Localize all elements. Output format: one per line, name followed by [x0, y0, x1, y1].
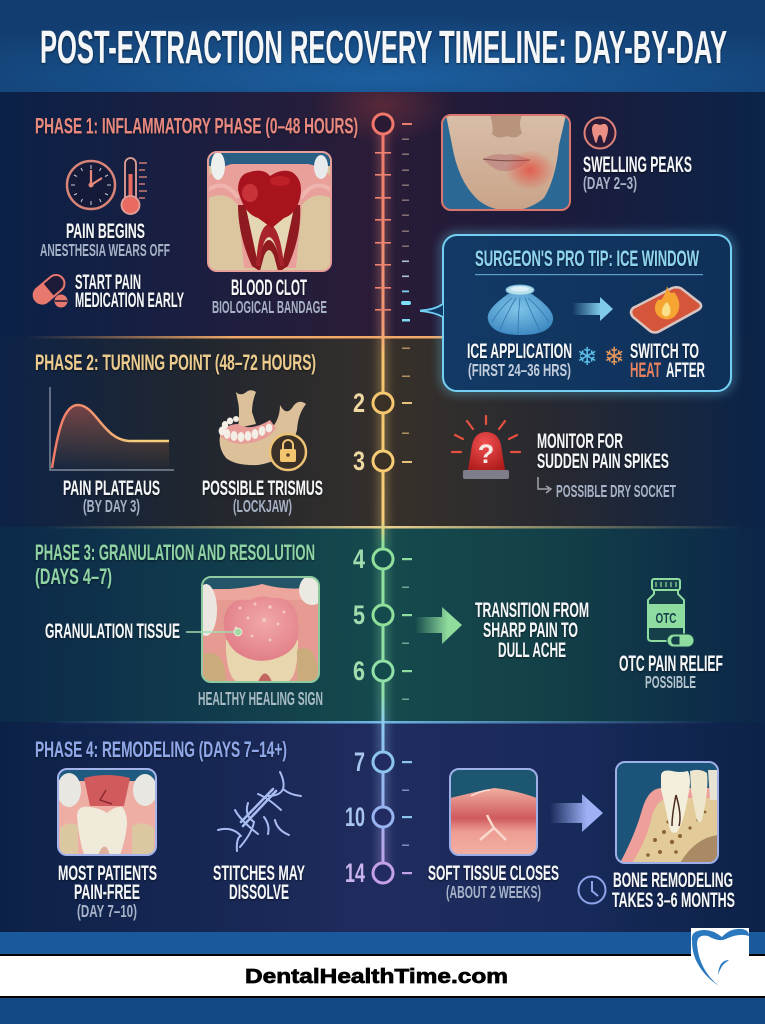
- text: pain plateaus: (BY DAY 3): [83, 496, 140, 516]
- day numbers: 2: [353, 388, 365, 418]
- text: switch to heat after: AFTER: [666, 359, 705, 382]
- text: transition: DULL ACHE: [498, 639, 566, 662]
- text: soft tissue closes: SOFT TISSUE CLOSES: [428, 862, 559, 885]
- day numbers: 5: [353, 600, 365, 630]
- day numbers: 10: [345, 802, 365, 832]
- text: blood clot: BIOLOGICAL BANDAGE: [212, 297, 327, 317]
- right minor ticks: [401, 123, 412, 874]
- text: switch to heat after: HEAT: [630, 359, 661, 382]
- text: most patients pain-free: PAIN-FREE: [74, 881, 140, 904]
- icon: alarm beacon: ?: [478, 439, 494, 469]
- text: transition: [475, 599, 589, 662]
- text: soft tissue closes: [428, 862, 559, 902]
- panel: phase 3: [35, 540, 723, 709]
- text: start pain medication early: MEDICATION EARLY: [75, 289, 184, 312]
- text: possible trismus: POSSIBLE TRISMUS: [202, 477, 323, 500]
- text: otc pain relief: [619, 651, 723, 692]
- text: anesthesia wears off: ANESTHESIA WEARS OFF: [40, 240, 170, 260]
- logo: tooth: [691, 928, 749, 986]
- image: blood clot in socket: [208, 152, 331, 271]
- text: stitches may dissolve: DISSOLVE: [229, 881, 289, 904]
- timeline nodes: [373, 114, 393, 883]
- day numbers: 7: [354, 747, 365, 777]
- arrow: ice to heat: [572, 297, 613, 321]
- text: transition: TRANSITION FROM: [475, 599, 589, 622]
- icon: tooth in circle: [584, 118, 616, 148]
- heading: phase 1: PHASE 1: INFLAMMATORY PHASE (0–48 HOURS): [35, 114, 358, 138]
- pointer: [420, 304, 443, 317]
- text: start pain medication early: START PAIN: [75, 271, 141, 294]
- text: pain plateaus: [63, 477, 160, 516]
- text: pain begins: PAIN BEGINS: [66, 220, 145, 243]
- footer: [0, 928, 765, 1024]
- icon: ice bag: [488, 285, 553, 335]
- arrow: periwinkle: [550, 794, 603, 832]
- text: pain plateaus: PAIN PLATEAUS: [63, 477, 160, 500]
- heading: phase 3: (DAYS 4–7): [35, 564, 112, 589]
- text: ice application: [467, 340, 572, 380]
- text: transition: SHARP PAIN TO: [483, 619, 578, 642]
- icon: pills: [30, 272, 68, 308]
- heading: phase 3: PHASE 3: GRANULATION AND RESOLUTION: [35, 540, 315, 565]
- text: blood clot: [212, 275, 327, 317]
- day numbers: 3: [353, 446, 365, 476]
- heading: phase 2: PHASE 2: TURNING POINT (48–72 HOURS): [35, 350, 316, 375]
- text: swelling peaks: [583, 152, 692, 193]
- day numbers: 14: [345, 858, 365, 888]
- image: closed soft tissue: [450, 769, 537, 855]
- icon: snowflake warm: ❄: [604, 342, 624, 371]
- icon: alarm beacon: [452, 416, 520, 479]
- tick marks on spine: [375, 152, 391, 311]
- text: most patients pain-free: [58, 862, 157, 921]
- heading: phase 4: PHASE 4: REMODELING (DAYS 7–14+): [35, 737, 287, 762]
- image: bone remodeling: [616, 762, 718, 863]
- text: ice application: (FIRST 24–36 HRS): [468, 360, 571, 380]
- panel: phase 2: [35, 350, 676, 516]
- text: blood clot: BLOOD CLOT: [231, 275, 307, 300]
- header banner: [0, 0, 765, 92]
- day numbers: 4: [353, 544, 365, 574]
- chart: pain curve: [50, 387, 174, 470]
- icon: jaw with lock: [219, 390, 306, 470]
- text: stitches may dissolve: [213, 862, 305, 904]
- arrow: to dry socket: [538, 477, 551, 493]
- timeline spine: [345, 114, 412, 888]
- text: monitor: [537, 430, 676, 501]
- day numbers: 6: [353, 656, 365, 686]
- text: stitches may dissolve: STITCHES MAY: [213, 862, 305, 885]
- text: possible trismus: [202, 477, 323, 516]
- image: granulation tissue: [195, 575, 325, 682]
- callout: surgeon's pro tip: [420, 235, 731, 391]
- image: swollen cheek: [442, 115, 570, 211]
- text: healthy healing sign: HEALTHY HEALING SIGN: [198, 689, 323, 709]
- phase separators: [25, 336, 740, 724]
- text: monitor: POSSIBLE DRY SOCKET: [556, 481, 676, 501]
- website name: DentalHealthTime.com: [245, 966, 508, 988]
- image: healed tooth: [57, 769, 157, 855]
- text: swelling peaks: (DAY 2–3): [583, 173, 637, 193]
- text: start pain medication early: [75, 271, 184, 312]
- arrow: green: [415, 607, 462, 644]
- text: switch to heat after: [630, 340, 705, 382]
- icon: OTC bottle: [648, 579, 694, 647]
- panel: phase 1: [30, 114, 692, 317]
- day numbers: [345, 388, 365, 888]
- text: monitor: MONITOR FOR: [537, 430, 623, 453]
- text: possible trismus: (LOCKJAW): [233, 496, 292, 516]
- icon: clock: [578, 876, 606, 904]
- icon: clock: [67, 161, 115, 209]
- text: most patients pain-free: (DAY 7–10): [77, 901, 137, 921]
- text: granulation tissue label: GRANULATION TISSUE: [45, 620, 180, 643]
- icon: stitches: [218, 772, 301, 851]
- leader: granulation tissue: [186, 628, 242, 636]
- icon: thermometer: [122, 158, 147, 214]
- icon: snowflake cool: ❄: [577, 342, 597, 371]
- text: switch to heat after: SWITCH TO: [630, 340, 699, 363]
- text: otc pain relief: POSSIBLE: [645, 672, 696, 692]
- text: soft tissue closes: (ABOUT 2 WEEKS): [446, 882, 541, 902]
- text: ice application: ICE APPLICATION: [467, 340, 572, 363]
- text: bone remodeling: [612, 869, 735, 912]
- panel: phase 4: [35, 737, 735, 921]
- text: most patients pain-free: MOST PATIENTS: [58, 862, 157, 885]
- icon: OTC bottle: OTC: [656, 610, 677, 627]
- heading: phase 3: [35, 540, 315, 589]
- text: monitor: SUDDEN PAIN SPIKES: [537, 450, 669, 473]
- icon: heat pad: [631, 286, 701, 332]
